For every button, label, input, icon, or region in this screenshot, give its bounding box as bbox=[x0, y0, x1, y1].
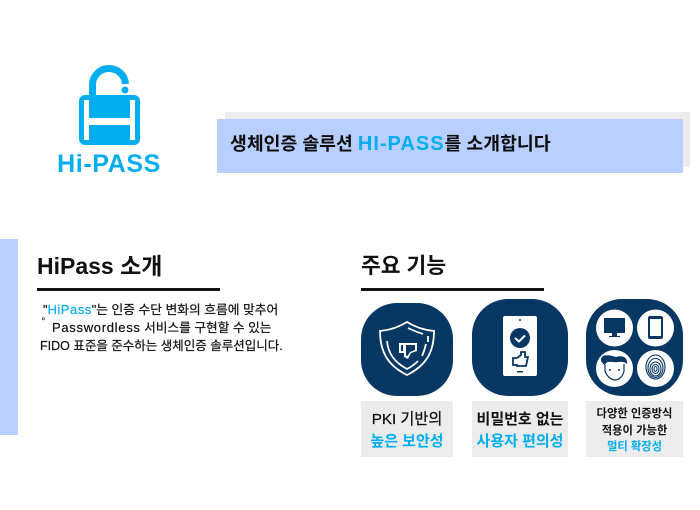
caption: multi bbox=[586, 401, 683, 457]
caption: PKI: 높은 보안성 bbox=[370, 433, 444, 450]
heading rule bbox=[361, 288, 544, 291]
logo wordmark: Hi-PASS bbox=[57, 150, 161, 178]
intro text: FIDO 표준을 준수하는 생체인증 솔루션입니다. bbox=[40, 339, 283, 353]
heading: 주요 기능: 주요 기능 bbox=[361, 254, 446, 278]
intro text: Passwordless 서비스를 구현할 수 있는 bbox=[52, 320, 271, 335]
intro text: D bbox=[42, 316, 45, 321]
card: PKI security bbox=[361, 303, 453, 457]
caption: multi: 다양한 인증방식 bbox=[597, 408, 672, 420]
heading rule bbox=[37, 288, 220, 291]
caption: passwordless bbox=[472, 401, 568, 457]
caption: passwordless: 비밀번호 없는 bbox=[477, 411, 563, 428]
banner shadow bbox=[225, 112, 690, 167]
card: multi authentication bbox=[586, 299, 683, 457]
icon: padlock bbox=[79, 68, 140, 145]
caption: PKI bbox=[361, 401, 453, 457]
icon: four auth methods bbox=[586, 299, 683, 396]
intro text bbox=[40, 302, 283, 353]
caption: multi: 적용이 가능한 bbox=[602, 425, 667, 437]
caption: PKI: PKI 기반의 bbox=[372, 411, 442, 428]
banner title text: 생체인증 솔루션 HI-PASS를 소개합니다 bbox=[230, 133, 551, 155]
icon: phone with check and thumb bbox=[472, 299, 568, 396]
left accent bar bbox=[0, 239, 18, 435]
heading: HiPass 소개: HiPass 소개 bbox=[37, 253, 162, 279]
intro text: "HiPass"는 인증 수단 변화의 흐름에 맞추어 bbox=[43, 302, 278, 317]
icon: shield with thumb bbox=[361, 303, 453, 396]
card: passwordless convenience bbox=[472, 299, 568, 457]
banner: title bbox=[217, 119, 683, 173]
caption: multi: 멀티 확장성 bbox=[607, 441, 662, 453]
logo: Hi-PASS padlock bbox=[57, 65, 161, 178]
caption: passwordless: 사용자 편의성 bbox=[477, 433, 563, 450]
